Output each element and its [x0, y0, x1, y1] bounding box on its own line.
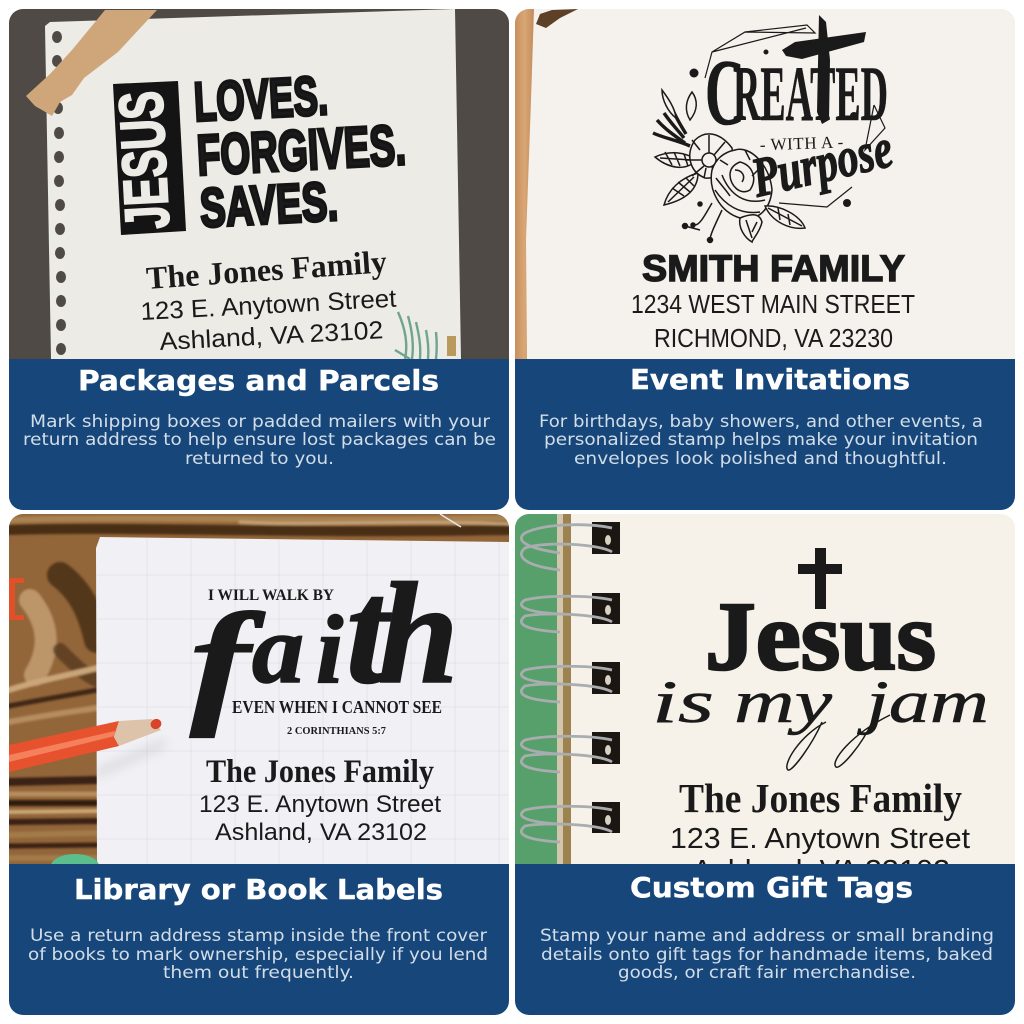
stamp: faith: a	[252, 596, 304, 704]
stamp: family address: 123 E. Anytown Street	[199, 791, 441, 818]
text: packages description: Mark shipping boxes or padded mailers with your	[30, 412, 490, 432]
heading: packages and parcels: Packages and Parcels	[78, 364, 439, 397]
text: gift tags description: goods, or craft fair merchandise.	[618, 963, 916, 983]
stamp: family address	[670, 775, 970, 887]
stamp: created: C	[705, 41, 745, 145]
stamp: family address: The Jones Family	[206, 754, 434, 790]
stamp: family address: 123 E. Anytown Street	[140, 285, 397, 326]
panel: library or book labels	[9, 514, 509, 1015]
stamp: is my jam: my	[734, 669, 833, 735]
stamp: with a: - WITH A -	[760, 132, 845, 154]
text: event description: personalized stamp helps make your invitation	[544, 430, 978, 450]
stamp: is my jam: is	[652, 669, 714, 735]
heading band	[9, 864, 509, 1015]
stamp: family address: The Jones Family	[679, 775, 962, 821]
stamp: smith family: SMITH FAMILY	[642, 248, 905, 289]
text: packages description	[23, 412, 496, 469]
panel: custom gift tags	[515, 514, 1015, 1015]
stamp: floral wreath	[653, 90, 805, 242]
stamp: loves forgives saves	[194, 75, 406, 228]
text: packages description: return address to help ensure lost packages can be	[23, 430, 496, 450]
icon: red clip	[9, 578, 24, 620]
icon: cross	[798, 548, 842, 609]
stamp: verse: 2 CORINTHIANS 5:7	[287, 726, 386, 737]
grid lines	[97, 538, 509, 864]
icon: green eraser	[52, 854, 99, 864]
stamp: geometric frame	[705, 25, 885, 207]
stamp: walk by: I WILL WALK BY	[208, 587, 334, 604]
text: library description	[28, 926, 488, 983]
heading band	[515, 359, 1015, 510]
icon: gold washi tape	[26, 10, 157, 116]
stamp: family address: Ashland, VA 23102	[215, 819, 427, 846]
stamp: family address: 123 E. Anytown Street	[670, 823, 970, 855]
stamp: Jesus block: JESUS	[107, 89, 183, 231]
text: gift tags description: Stamp your name and address or small branding	[540, 926, 994, 946]
text: gift tags description	[540, 926, 994, 983]
stamp: address	[632, 294, 914, 350]
paper punch holes	[52, 31, 66, 355]
stamp: faith: t	[346, 549, 392, 715]
photo: note paper	[45, 9, 461, 359]
flourish: script descender loops	[787, 715, 890, 770]
stamp: address: 1234 WEST MAIN STREET	[631, 289, 915, 319]
text: library description: Use a return address stamp inside the front cover	[30, 926, 487, 946]
stamp: family address: Ashland, VA 23102	[692, 855, 950, 887]
stamp: even when: EVEN WHEN I CANNOT SEE	[232, 697, 442, 717]
stamp: faith: f	[190, 585, 266, 738]
stamp: family address	[199, 754, 441, 846]
heading band	[515, 864, 1015, 1015]
photo: wood grain	[9, 518, 509, 858]
heading: library or book labels: Library or Book Labels	[74, 873, 443, 906]
text: library description: them out frequently.	[163, 963, 354, 983]
icon: brush cross	[782, 15, 866, 124]
stamp: family address: Ashland, VA 23102	[159, 316, 384, 356]
stamp: purpose: Purpose	[745, 117, 898, 210]
stamp: loves forgives saves: SAVES.	[198, 170, 339, 239]
photo: wooden edge	[515, 9, 534, 359]
stamp: loves forgives saves: FORGIVES.	[195, 113, 407, 188]
panel: event invitations	[515, 9, 1015, 510]
stamp: address: RICHMOND, VA 23230	[654, 323, 893, 353]
photo: page edges	[557, 514, 571, 874]
photo: paper needle	[440, 514, 461, 527]
stamp: Jesus block	[107, 81, 186, 235]
stamp: jesus: Jesus	[705, 583, 936, 691]
text: event description	[539, 412, 983, 469]
heading band	[9, 359, 509, 510]
stamp: dots	[690, 50, 858, 207]
heading: event invitations: Event Invitations	[630, 363, 910, 396]
stamp: is my jam: jam	[856, 669, 989, 735]
text: gift tags description: details onto gift tags for handmade items, baked	[541, 945, 993, 965]
icon: red pencil	[9, 717, 165, 778]
heading: custom gift tags: Custom Gift Tags	[630, 871, 913, 904]
photo: grid paper	[96, 537, 509, 864]
stamp: faith: h	[378, 554, 459, 714]
icon: spiral binding	[521, 522, 620, 842]
stamp: loves forgives saves: LOVES.	[192, 64, 329, 133]
text: event description: envelopes look polished and thoughtful.	[574, 449, 947, 469]
text: packages description: returned to you.	[185, 449, 334, 469]
text: library description: of books to mark ownership, especially if you lend	[28, 945, 488, 965]
stamp: family address	[142, 251, 396, 350]
photo: green cover	[515, 514, 558, 874]
stamp: faith: i	[316, 596, 343, 704]
icon: pine sprig	[395, 312, 437, 359]
text: event description: For birthdays, baby showers, and other events, a	[539, 412, 983, 432]
panel: packages and parcels	[9, 9, 509, 510]
icon: gold fleck	[447, 336, 456, 356]
stamp: family address: The Jones Family	[145, 243, 388, 296]
photo: twig	[536, 9, 578, 28]
